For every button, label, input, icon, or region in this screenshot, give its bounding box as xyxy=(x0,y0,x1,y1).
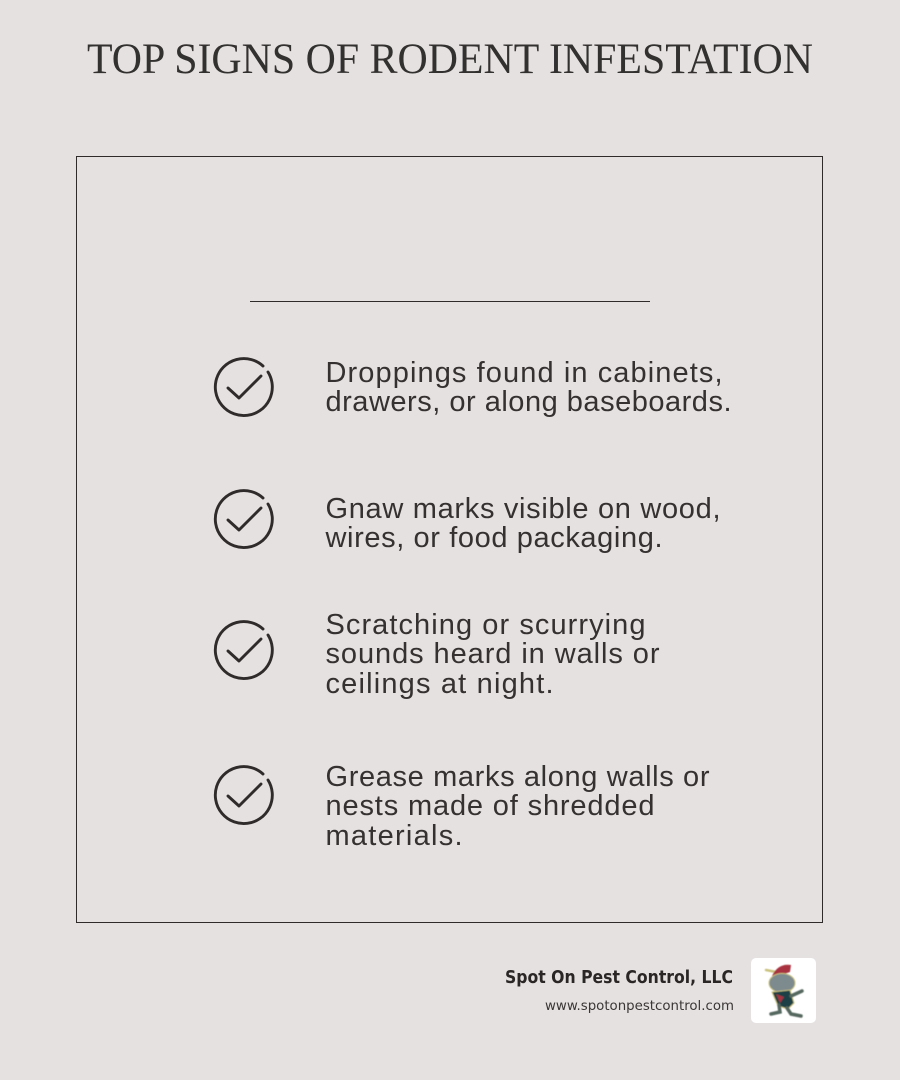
icon: check 4 xyxy=(215,767,272,824)
text: grease marks xyxy=(326,761,710,852)
icon: logo mascot xyxy=(751,958,816,1023)
title: TOP SIGNS OF RODENT INFESTATION xyxy=(87,36,813,83)
text: scratching: Scratching or scurrying xyxy=(326,609,646,641)
text: scratching: ceilings at night. xyxy=(326,668,554,700)
text: scratching xyxy=(326,609,660,700)
text: gnaw marks: wires, or food packaging. xyxy=(324,522,662,554)
text: gnaw marks: Gnaw marks visible on wood, xyxy=(326,493,720,525)
text: gnaw marks xyxy=(324,493,720,554)
text: droppings: drawers, or along baseboards. xyxy=(326,386,732,418)
text: grease marks: nests made of shredded xyxy=(326,790,654,822)
text: grease marks: materials. xyxy=(326,820,462,852)
text: scratching: sounds heard in walls or xyxy=(326,638,660,670)
icon: check 2 xyxy=(215,491,272,548)
company name: Spot On Pest Control, LLC xyxy=(505,968,733,988)
icon: check 3 xyxy=(215,622,272,679)
text: droppings: Droppings found in cabinets, xyxy=(326,357,722,389)
panel: signs list xyxy=(76,156,822,922)
text: grease marks: Grease marks along walls or xyxy=(326,761,710,793)
text: droppings xyxy=(326,357,732,418)
website: www.spotonpestcontrol.com xyxy=(545,998,734,1014)
icon: check 1 xyxy=(215,359,272,416)
